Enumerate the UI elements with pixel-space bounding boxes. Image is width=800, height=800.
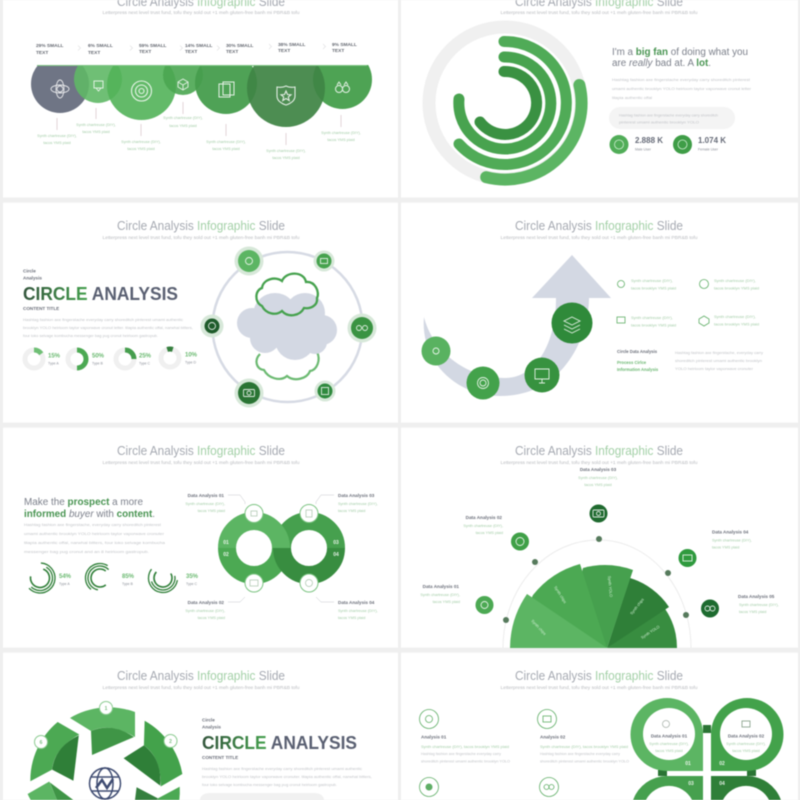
wedge labels: Synth chips <box>630 598 645 616</box>
body text: Hashtag fashion axe fingerstache, everyday carry shoreditch pinterest <box>24 522 162 527</box>
wedge labels: Synth chips <box>553 585 567 604</box>
donut: type A: 15% <box>48 354 61 360</box>
subtitle: Letterpress next level trust fund, tofu they sold out +1 meh gluten-free banh mi PBR&B tofu <box>102 235 300 240</box>
captions: tacos YMS plaid <box>327 138 355 142</box>
feature 02 <box>538 710 629 764</box>
donut: type C: Type C <box>139 362 151 366</box>
wedge labels: Synth YOLO <box>640 625 660 640</box>
callout 03: tacos YMS plaid <box>338 509 365 513</box>
headline: I'm a big fan of doing what you <box>612 47 748 58</box>
process text: Hashtag fashion axe fingerstache, everyday carry <box>675 350 763 355</box>
callout 02: Data Analysis 02 <box>188 600 224 605</box>
chevrons <box>78 44 326 50</box>
captions: Synth chartreuse (DIY), <box>266 149 306 153</box>
step: target <box>466 366 500 400</box>
big heading: CIRCLE ANALYSIS <box>202 733 357 753</box>
petal 02: Data Analysis 02 <box>728 734 765 738</box>
icon: binoculars <box>336 82 350 92</box>
step headings: 59% SMALL <box>139 43 167 49</box>
feature 02: Hashtag fashion axe fingerstache everyday carry <box>540 751 620 756</box>
callout 01: Data Analysis 01 <box>188 493 224 498</box>
infinity chart <box>227 521 336 575</box>
feature 02: shoreditch pinterest umami authentic brooklyn YOLO <box>540 758 629 764</box>
globe icon <box>90 768 120 799</box>
step headings: 29% SMALL <box>36 43 64 49</box>
step headings: TEXT <box>36 50 48 56</box>
feature 01: Hashtag fashion axe fingerstache everyday carry <box>421 751 501 756</box>
arrow <box>424 255 611 396</box>
stat: male user: Male User <box>635 148 652 152</box>
donut: type A: Type A <box>48 362 59 366</box>
pinwheel chart <box>21 707 186 800</box>
callout 04: Synth chartreuse (DIY), <box>712 538 752 542</box>
number badges <box>34 702 177 748</box>
panel: concentric arcs <box>401 0 798 198</box>
panel: growth arrow <box>401 203 798 423</box>
node: gear <box>476 596 494 614</box>
step headings: 9% SMALL <box>332 42 357 48</box>
leader lines <box>57 102 341 145</box>
title: Circle Analysis Infographic Slide <box>515 218 683 233</box>
feature grid: tacos brooklyn YMS plaid <box>714 322 759 326</box>
petal 04 <box>711 776 781 800</box>
node: money <box>590 504 608 522</box>
feature grid: Synth chartreuse (DIY), <box>631 315 673 320</box>
content title: CONTENT TITLE <box>23 306 59 311</box>
step headings: 30% SMALL <box>226 43 254 49</box>
callout pill <box>200 793 324 800</box>
subtitle: Letterpress next level trust fund, tofu they sold out +1 meh gluten-free banh mi PBR&B tofu <box>500 235 698 240</box>
body text: brooklyn YOLO heirloom taylor vaporwave cronut letter. tilapia authentic offal, narwhal bitters, <box>23 325 193 330</box>
stat: female user: 1.074 K <box>698 136 726 145</box>
content title: CONTENT TITLE <box>202 755 238 760</box>
stat: female user <box>673 135 726 154</box>
callout 02: Data Analysis 02 <box>466 515 502 520</box>
panel: infinity loop: informed buyer with content. <box>24 509 155 520</box>
petal 02: 02 <box>719 761 725 767</box>
captions: tacos YMS plaid <box>127 147 155 151</box>
petal 01 <box>630 698 703 771</box>
panel: cloud cycle <box>3 203 398 423</box>
spiral chart: type C <box>146 561 199 595</box>
number badges: 6 <box>40 740 43 746</box>
petal 04: 04 <box>719 781 725 787</box>
process text: shoreditch pinterest umami authentic brooklyn <box>675 358 762 363</box>
radial bar chart <box>429 27 582 180</box>
callout 05: Synth chartreuse (DIY), <box>739 603 779 607</box>
feature 02: Analysis 02 <box>540 734 566 740</box>
outer arc <box>503 540 691 648</box>
infinity numbers: 03 <box>333 540 339 546</box>
body text: four loko selvage kombucha messenger bag pug cronut heirloom gastropub. <box>202 782 337 787</box>
icon: shield <box>277 86 295 105</box>
captions: Synth chartreuse (DIY), <box>76 123 116 127</box>
number badges: 1 <box>105 706 108 712</box>
feature 01: shoreditch pinterest umami authentic brooklyn YOLO <box>421 758 510 764</box>
body text <box>24 522 166 554</box>
captions: tacos YMS plaid <box>43 141 71 145</box>
small heading: Analysis <box>202 724 221 730</box>
big heading: CIRCLE ANALYSIS <box>23 284 178 304</box>
node: mail <box>314 250 334 272</box>
fan wedges <box>510 564 677 648</box>
captions: Synth chartreuse (DIY), <box>321 131 361 135</box>
callout 03: tacos YMS plaid <box>584 483 612 487</box>
icon: frames <box>219 82 234 97</box>
callout 04 <box>712 530 752 550</box>
stat: male user <box>610 135 663 154</box>
step headings: 38% SMALL <box>278 42 306 48</box>
infinity numbers <box>223 540 339 558</box>
feature 03 icon <box>420 778 438 796</box>
callout 01: tacos YMS plaid <box>198 509 225 513</box>
number badges: 2 <box>169 739 172 745</box>
callout 04: tacos YMS plaid <box>338 616 365 620</box>
subtitle: Letterpress next level trust fund, tofu they sold out +1 meh gluten-free banh mi PBR&B tofu <box>500 460 698 465</box>
callout 02 <box>185 600 225 620</box>
callout 05: Data Analysis 05 <box>738 594 775 599</box>
process labels: Process Cirlce <box>617 360 647 365</box>
callout pill: pinterest umami authentic brooklyn YOLO <box>619 120 699 124</box>
captions: Synth chartreuse (DIY), <box>121 140 161 144</box>
spiral chart: type B: Type B <box>122 582 134 586</box>
spiral chart: type C: Type C <box>186 582 198 586</box>
feature grid: tacos brooklyn YMS plaid <box>631 322 676 328</box>
body text: Hashtag fashion axe fingerstache everyday carry shoreditch pinterest umami authentic <box>23 317 183 322</box>
donut: type C <box>116 350 152 368</box>
body text: tilapia authentic offal, narwhal bitters, four loko selvage kombucha <box>24 540 166 545</box>
callout pill: Hashtag fashion axe fingerstache everyday carry shoreditch <box>619 112 718 118</box>
spiral chart: type A <box>23 561 72 595</box>
small heading <box>23 268 42 280</box>
node: grid <box>511 532 529 550</box>
callout 01: Synth chartreuse (DIY), <box>420 593 460 597</box>
spiral chart: type C: 35% <box>186 574 199 580</box>
subtitle: Letterpress next level trust fund, tofu they sold out +1 meh gluten-free banh mi PBR&B tofu <box>500 685 698 690</box>
step headings <box>36 42 357 56</box>
title: Circle Analysis Infographic Slide <box>117 218 285 233</box>
body text <box>612 77 752 100</box>
donut: type C: 25% <box>139 354 152 360</box>
donut: type D: Type D <box>185 360 197 364</box>
feature grid: Synth chartreuse (DIY), <box>714 314 756 319</box>
donut: type B <box>68 350 105 368</box>
body text <box>202 766 372 787</box>
connectors <box>658 725 756 776</box>
feature 01: Analysis 01 <box>421 734 447 740</box>
callout 02: Synth chartreuse (DIY), <box>463 524 503 528</box>
donut: type B: Type B <box>92 362 104 366</box>
feature 01: Synth chartreuse (DIY), tacos brooklyn YMS plaid <box>421 744 509 749</box>
circle row <box>30 64 373 128</box>
callout 01: Data Analysis 01 <box>423 584 459 589</box>
step: presentation <box>524 358 560 392</box>
step headings: TEXT <box>139 49 151 55</box>
spiral chart: type B: 85% <box>122 574 135 580</box>
body text: umami authentic brooklyn YOLO heirloom taylor vaporwave cronut letter <box>612 86 752 91</box>
small heading <box>202 718 221 730</box>
callout 03: Synth chartreuse (DIY), <box>338 502 378 506</box>
panel: fan chart <box>401 428 798 648</box>
title: Circle Analysis Infographic Slide <box>117 668 285 683</box>
subtitle: Letterpress next level trust fund, tofu they sold out +1 meh gluten-free banh mi PBR&B tofu <box>500 10 698 15</box>
callout 04: tacos YMS plaid <box>712 546 739 550</box>
callout 05: tacos YMS plaid <box>739 610 766 614</box>
connectors <box>228 495 334 602</box>
panel: infinity loop <box>3 428 398 648</box>
feature grid: Synth chartreuse (DIY), <box>631 278 673 283</box>
callout 02: tacos YMS plaid <box>476 531 503 535</box>
feature 01 <box>420 710 510 764</box>
infinity numbers: 01 <box>223 540 229 546</box>
node: shield <box>314 380 336 402</box>
wedge labels: Synth chips <box>530 619 547 636</box>
body text: brooklyn YOLO heirloom taylor vaporwave cronuter. tilapia authentic offal, narwhal bitters, <box>202 774 372 779</box>
small heading: Circle <box>202 718 215 722</box>
icon nodes <box>245 504 318 592</box>
stat: female user: Female User <box>698 148 719 152</box>
panel: four petals <box>401 653 798 800</box>
callout 01: Synth chartreuse (DIY), <box>185 502 225 506</box>
feature 04 icon <box>540 778 558 796</box>
grey cloud <box>237 293 337 360</box>
feature grid <box>617 278 759 328</box>
callout 04 <box>338 600 378 620</box>
petal 02 <box>711 698 784 771</box>
process text <box>675 350 763 371</box>
petal 01: Data Analysis 01 <box>651 734 688 738</box>
step headings: TEXT <box>226 49 238 55</box>
body text: four loko selvage kombucha messenger bag pug cronut heirloom gastropub. <box>23 333 158 338</box>
body text: Hashtag fashion axe fingerstache everyday carry shoreditch pinterest <box>612 77 751 82</box>
callout 03: Data Analysis 03 <box>338 493 375 498</box>
callout 02: tacos YMS plaid <box>198 616 225 620</box>
feature grid: tacos brooklyn YMS plaid <box>714 286 759 290</box>
donut: type B: 50% <box>92 354 105 360</box>
title: Circle Analysis Infographic Slide <box>515 668 683 683</box>
spiral chart: type A: 54% <box>59 574 72 580</box>
icon: cube <box>178 79 188 90</box>
icon: atom <box>51 80 69 98</box>
callout pill <box>609 107 735 129</box>
subtitle: Letterpress next level trust fund, tofu they sold out +1 meh gluten-free banh mi PBR&B tofu <box>102 10 300 15</box>
wedge labels: Synth YOLO <box>607 576 613 597</box>
step: gear <box>422 336 450 366</box>
ring <box>212 252 362 402</box>
captions <box>37 116 361 160</box>
subtitle: Letterpress next level trust fund, tofu they sold out +1 meh gluten-free banh mi PBR&B tofu <box>102 460 300 465</box>
callout 04: Data Analysis 04 <box>338 600 375 605</box>
captions: tacos YMS plaid <box>82 130 110 134</box>
callout 03 <box>578 467 618 487</box>
panel: stepped circles <box>3 0 398 198</box>
callout 03: Synth chartreuse (DIY), <box>578 476 618 480</box>
infinity numbers: 02 <box>223 552 229 558</box>
icon: target <box>132 81 152 101</box>
icon: screen <box>94 81 103 91</box>
spiral chart: type B <box>80 558 135 598</box>
captions: tacos YMS plaid <box>169 124 197 128</box>
callout 01: tacos YMS plaid <box>433 600 460 604</box>
donut: type D <box>159 347 198 369</box>
step headings: 6% SMALL <box>88 43 113 49</box>
feature 02: Synth chartreuse (DIY), tacos brooklyn YMS plaid <box>540 744 628 749</box>
body text: Hashtag fashion axe fingerstache everyday carry shoreditch pinterest umami authentic <box>202 766 362 771</box>
callout 03: Data Analysis 03 <box>580 467 617 472</box>
callout 01 <box>185 493 225 513</box>
callout 02 <box>463 515 503 535</box>
title: Circle Analysis Infographic Slide <box>117 443 285 458</box>
node: target <box>200 314 224 338</box>
captions: Synth chartreuse (DIY), <box>206 140 246 144</box>
lower cloud outline <box>257 352 319 379</box>
petal 02: tacos YMS plaid <box>732 749 760 753</box>
arc dots <box>503 536 689 623</box>
donut: type A <box>25 350 61 368</box>
step headings: TEXT <box>278 48 290 54</box>
subtitle: Letterpress next level trust fund, tofu they sold out +1 meh gluten-free banh mi PBR&B tofu <box>102 685 300 690</box>
process labels <box>617 349 659 372</box>
step headings: 14% SMALL <box>185 43 213 49</box>
panel: pinwheel <box>3 653 398 800</box>
step: layers <box>552 302 592 344</box>
title: Circle Analysis Infographic Slide <box>515 443 683 458</box>
process text: YOLO heirloom taylor vaporwave cronuter <box>675 366 754 371</box>
petal 02: Synth chartreuse (DIY), <box>726 742 766 746</box>
small heading: Circle <box>23 268 36 274</box>
petal 03 <box>633 776 703 800</box>
upper cloud outline <box>256 274 318 315</box>
node: binoculars <box>348 314 376 342</box>
captions: Synth chartreuse (DIY), <box>163 116 203 120</box>
body text: tilapia authentic offal <box>612 95 652 100</box>
node: binoculars <box>701 600 719 618</box>
petal 01: tacos YMS plaid <box>655 749 683 753</box>
node: camera <box>234 378 264 408</box>
infinity numbers: 04 <box>333 552 339 558</box>
stat: male user: 2.888 K <box>635 136 663 145</box>
callout 04: Synth chartreuse (DIY), <box>338 609 378 613</box>
process labels: Information Analysis <box>617 367 659 372</box>
petal 01: Synth chartreuse (DIY), <box>649 742 689 746</box>
captions: tacos YMS plaid <box>272 156 300 160</box>
feature grid: Synth chartreuse (DIY), <box>714 278 756 283</box>
petal 01: 01 <box>685 761 691 767</box>
callout 01 <box>420 584 460 604</box>
panel: concentric arcs: are really bad at. A lot. <box>612 58 711 69</box>
callout 02: Synth chartreuse (DIY), <box>185 609 225 613</box>
petal 03: 03 <box>688 781 694 787</box>
callout 05 <box>738 594 779 614</box>
callout 03 <box>338 493 378 513</box>
body text: umami authentic brooklyn YOLO heirloom taylor vaporwave cronuter <box>24 531 165 536</box>
feature grid: tacos brooklyn YMS plaid <box>631 286 676 290</box>
process labels: Circle Data Analysis <box>617 349 658 354</box>
step headings: TEXT <box>185 49 197 55</box>
wedge labels <box>530 576 660 640</box>
headline: Make the prospect a more <box>24 497 143 508</box>
node: sun <box>234 246 264 276</box>
body text: messenger bag pug cronut and an 8 heirloom gastropub. <box>24 549 149 554</box>
body text <box>23 317 193 338</box>
captions: tacos YMS plaid <box>212 147 240 151</box>
small heading: Analysis <box>23 276 42 280</box>
captions: Synth chartreuse (DIY), <box>37 134 77 138</box>
step headings: TEXT <box>332 48 344 54</box>
donut: type D: 10% <box>185 352 198 358</box>
node: mail <box>678 549 696 567</box>
spiral chart: type A: Type A <box>59 582 70 586</box>
callout 04: Data Analysis 04 <box>712 530 749 534</box>
step headings: TEXT <box>88 50 100 56</box>
